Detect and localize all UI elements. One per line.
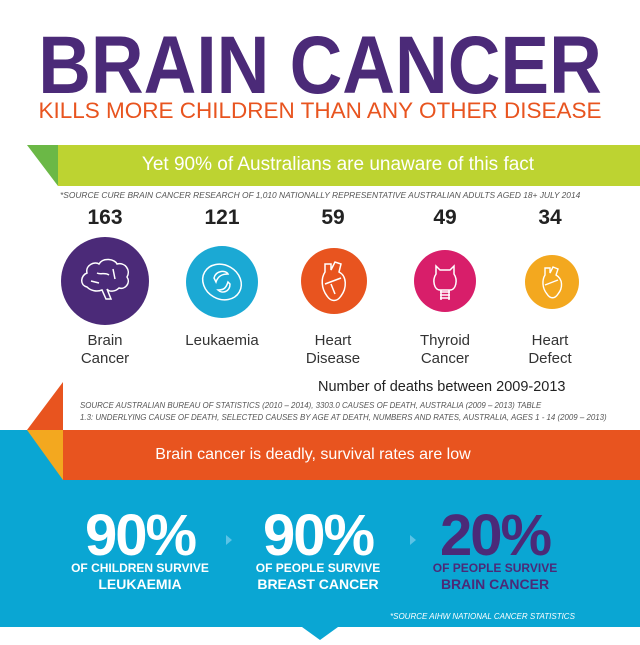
stat: thyroid cancer xyxy=(414,206,476,367)
stat: heart defect: Defect xyxy=(528,350,572,367)
stat: heart defect xyxy=(525,206,579,367)
stat: brain cancer survival xyxy=(433,503,557,592)
stat: breast cancer survival: OF PEOPLE SURVIVE xyxy=(256,561,380,575)
source note 2 xyxy=(80,401,607,422)
stat: heart disease: Disease xyxy=(306,350,360,367)
stat: heart disease xyxy=(301,206,367,367)
stat: thyroid cancer: Cancer xyxy=(421,350,469,367)
icon: thyroid xyxy=(414,250,476,312)
stat: brain cancer survival: OF PEOPLE SURVIVE xyxy=(433,561,557,575)
source note 3: *SOURCE AIHW NATIONAL CANCER STATISTICS xyxy=(390,612,575,621)
stat: leukaemia survival: OF CHILDREN SURVIVE xyxy=(71,561,209,575)
stat: leukaemia xyxy=(185,206,259,349)
icon: cell xyxy=(186,246,258,318)
blue panel background xyxy=(0,382,640,640)
orange banner xyxy=(63,430,640,480)
icon: heart small xyxy=(525,255,579,309)
source note 1: *SOURCE CURE BRAIN CANCER RESEARCH OF 1,010 NATIONALLY REPRESENTATIVE AUSTRALIAN ADULTS AGED 18+ JULY 2014 xyxy=(60,190,580,200)
icon: heart xyxy=(301,248,367,314)
arrow xyxy=(226,535,232,545)
stat: leukaemia survival: 90% xyxy=(85,503,195,568)
green banner: Yet 90% of Australians are unaware of this fact xyxy=(142,154,534,175)
stat: heart defect: Heart xyxy=(532,332,568,349)
source note 2: SOURCE AUSTRALIAN BUREAU OF STATISTICS (2010 – 2014), 3303.0 CAUSES OF DEATH, AUSTRALIA (2009 – 2013) TABLE xyxy=(80,401,541,410)
source note 2: 1.3: UNDERLYING CAUSE OF DEATH, SELECTED CAUSES BY AGE AT DEATH, NUMBERS AND RATES, AUSTRALIA, AGES 1 - 14 (2009 – 2013) xyxy=(80,413,607,422)
stat: heart disease: Heart xyxy=(315,332,351,349)
icon: brain xyxy=(61,237,149,325)
chart caption: Number of deaths between 2009-2013 xyxy=(318,379,565,395)
stat: breast cancer survival: 90% xyxy=(263,503,373,568)
green banner xyxy=(27,145,640,186)
stat: leukaemia survival xyxy=(71,503,209,592)
stat: leukaemia: Leukaemia xyxy=(185,332,259,349)
stat: thyroid cancer: 49 xyxy=(433,206,457,229)
subtitle: KILLS MORE CHILDREN THAN ANY OTHER DISEASE xyxy=(38,98,602,123)
stat: brain cancer: Cancer xyxy=(81,350,129,367)
stat: thyroid cancer: Thyroid xyxy=(420,332,470,349)
stat: heart defect: 34 xyxy=(538,206,562,229)
stat: breast cancer survival xyxy=(256,503,380,592)
stat: brain cancer xyxy=(61,206,149,367)
stat: breast cancer survival: BREAST CANCER xyxy=(257,576,379,592)
stat: brain cancer survival: BRAIN CANCER xyxy=(441,576,549,592)
arrow xyxy=(410,535,416,545)
stat: leukaemia survival: LEUKAEMIA xyxy=(98,576,182,592)
stat: leukaemia: 121 xyxy=(204,206,240,229)
stat: brain cancer: 163 xyxy=(87,206,123,229)
orange banner: Brain cancer is deadly, survival rates are low xyxy=(155,446,471,463)
title: BRAIN CANCER xyxy=(38,20,602,111)
stat: brain cancer: Brain xyxy=(87,332,123,349)
stat: brain cancer survival: 20% xyxy=(440,503,550,568)
stat: heart disease: 59 xyxy=(321,206,345,229)
